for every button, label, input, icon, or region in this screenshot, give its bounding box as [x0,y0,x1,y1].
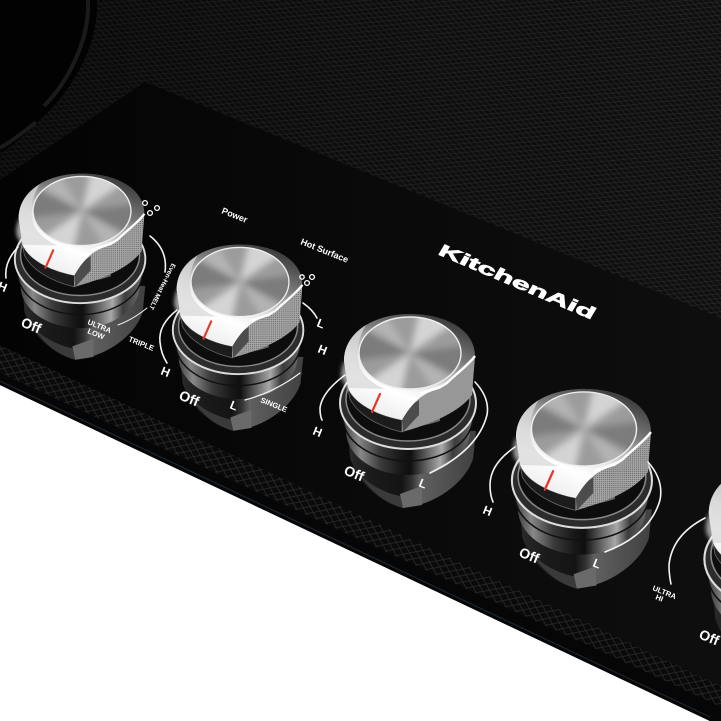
mode labels [86,262,678,604]
burner circle [0,0,97,153]
high and low labels: H [316,342,329,358]
knob 4 [512,383,652,589]
off labels [19,314,721,648]
off labels: Off [697,626,721,648]
power label: Power [220,206,250,225]
mode labels: LOW [86,327,107,342]
knob 3 [340,308,476,508]
high and low labels: L [417,476,429,492]
off labels: Off [177,387,202,409]
off labels: Off [342,462,367,484]
knob 2 [173,239,303,431]
high and low labels: L [591,556,603,572]
icon: element indicators [143,201,314,285]
mode labels: Even-Heat MELT [147,262,176,311]
high and low labels: L [228,398,240,414]
knob 5 partial [704,456,721,672]
high and low labels: L [315,316,327,332]
mode labels: TRIPLE [127,335,155,353]
mode labels: ULTRA [86,318,113,335]
mode labels: HI [654,593,665,604]
high and low labels: H [481,503,494,519]
bottom mesh band [0,345,721,707]
mode labels: SINGLE [259,396,289,414]
high and low labels: H [159,364,172,380]
hot surface label: Hot Surface [299,237,350,265]
glass front edge [0,373,721,721]
dial arcs [6,236,705,584]
mode labels: ULTRA [651,584,678,601]
knob 1 [15,168,145,360]
off labels: Off [517,544,542,566]
off labels: Off [19,314,44,336]
brand logo: KitchenAid [435,241,599,323]
high and low labels: H [311,424,324,440]
high and low labels [0,279,603,572]
